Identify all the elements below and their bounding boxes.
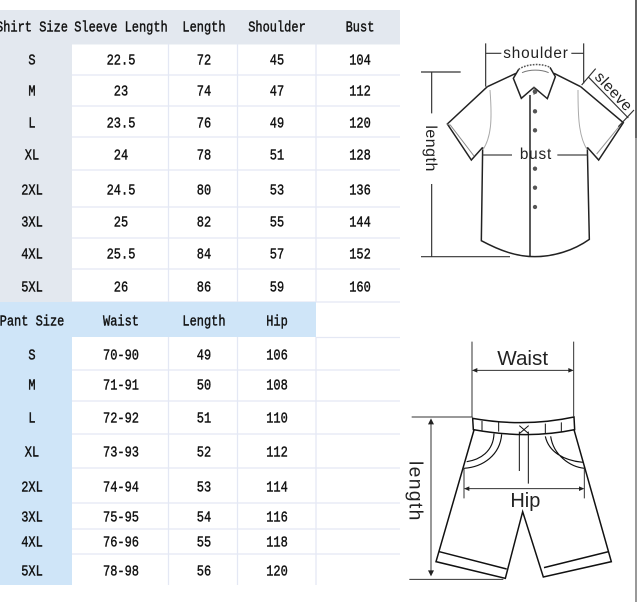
pant row S: S (28, 349, 36, 365)
shirt row XL: XL (25, 149, 39, 165)
shirt row XL: 128 (349, 149, 371, 165)
panel: shirt size table (0, 10, 400, 302)
pant row XL (25, 446, 288, 462)
shirt row 4XL: 57 (270, 248, 284, 264)
shirt row M: 47 (270, 85, 284, 101)
shirt row S: 72 (197, 54, 211, 70)
pant row L: 72-92 (103, 412, 139, 428)
shirt row XL: 24 (114, 149, 128, 165)
shirt row L: 120 (349, 117, 371, 133)
hip measure: Hip (510, 490, 540, 512)
pant row 2XL: 114 (266, 481, 288, 497)
pant row S (28, 349, 288, 365)
pant row 5XL: 5XL (21, 565, 43, 581)
shirt row 3XL (21, 216, 371, 232)
shirt row 2XL: 24.5 (107, 184, 135, 200)
pant row S: 49 (197, 349, 211, 365)
length measure: length (422, 125, 439, 172)
shirt table header: Shoulder (248, 21, 306, 37)
shirt table header (0, 21, 374, 37)
pant row 3XL: 3XL (21, 511, 43, 527)
pant row XL: 112 (266, 446, 288, 462)
pant row S: 106 (266, 349, 288, 365)
pant row 4XL (21, 536, 288, 552)
pant row M: 71-91 (103, 379, 139, 395)
shirt row 4XL: 25.5 (107, 248, 135, 264)
pant row L: 51 (197, 412, 211, 428)
pant row L (28, 412, 288, 428)
shoulder measure (486, 43, 584, 87)
shirt row 3XL: 55 (270, 216, 284, 232)
pant row XL: XL (25, 446, 39, 462)
shirt row S: 22.5 (107, 54, 135, 70)
shirt row 2XL: 2XL (21, 184, 43, 200)
pant row L: L (28, 412, 36, 428)
bust measure: bust (520, 146, 552, 163)
pant row 5XL: 78-98 (103, 565, 139, 581)
pant row 4XL: 55 (197, 536, 211, 552)
shirt buttons (533, 89, 537, 209)
shoulder measure: shoulder (503, 45, 569, 62)
shirt row 3XL: 82 (197, 216, 211, 232)
shirt row 4XL: 4XL (21, 248, 43, 264)
shirt row S: 104 (349, 54, 371, 70)
shirt row L: 23.5 (107, 117, 135, 133)
shirt row 2XL: 53 (270, 184, 284, 200)
shirt row M: 74 (197, 85, 211, 101)
shirt row 5XL: 26 (114, 281, 128, 297)
waist measure: Waist (497, 347, 548, 370)
shirt row 5XL: 59 (270, 281, 284, 297)
pant row 4XL: 118 (266, 536, 288, 552)
pant row 5XL (21, 565, 288, 581)
pant row 2XL: 74-94 (103, 481, 139, 497)
shirt row L (28, 117, 371, 133)
pant row L: 110 (266, 412, 288, 428)
hip measure (464, 468, 584, 512)
shirt row 2XL: 80 (197, 184, 211, 200)
pant row 5XL: 56 (197, 565, 211, 581)
pant row 3XL: 75-95 (103, 511, 139, 527)
pant table header (0, 315, 288, 331)
shirt row S: 45 (270, 54, 284, 70)
shirt row L: 76 (197, 117, 211, 133)
shirt row 3XL: 3XL (21, 216, 43, 232)
panel: pant size table (0, 302, 400, 585)
length measure: length (404, 461, 425, 522)
shirt row L: L (28, 117, 36, 133)
pant row 4XL: 76-96 (103, 536, 139, 552)
pant row 2XL: 2XL (21, 481, 43, 497)
image right edge (635, 0, 637, 602)
sleeve measure (582, 69, 636, 127)
shirt row M (28, 85, 371, 101)
length measure (421, 72, 510, 257)
shirt row 4XL: 152 (349, 248, 371, 264)
waist measure (472, 342, 574, 417)
diagram: shirt measurements (421, 43, 636, 257)
pant row M: 50 (197, 379, 211, 395)
shorts outline (436, 417, 611, 578)
pant row 3XL: 116 (266, 511, 288, 527)
pant table header: Hip (266, 315, 288, 331)
pant row M (28, 379, 288, 395)
shirt row 5XL: 86 (197, 281, 211, 297)
pant row 2XL (21, 481, 288, 497)
shirt table header: Length (182, 21, 226, 37)
shirt row 5XL: 5XL (21, 281, 43, 297)
shirt row XL: 78 (197, 149, 211, 165)
pant row M: M (28, 379, 36, 395)
pant row 5XL: 120 (266, 565, 288, 581)
shirt row XL: 51 (270, 149, 284, 165)
pant row XL: 73-93 (103, 446, 139, 462)
pant row 2XL: 53 (197, 481, 211, 497)
pant row 3XL: 54 (197, 511, 211, 527)
shirt row L: 49 (270, 117, 284, 133)
shirt row 4XL (21, 248, 371, 264)
pant row XL: 52 (197, 446, 211, 462)
pant table header: Length (182, 315, 226, 331)
sleeve measure: sleeve (591, 69, 636, 115)
shirt row M: 23 (114, 85, 128, 101)
bust measure (483, 146, 587, 163)
pant table header: Waist (103, 315, 139, 331)
pant row S: 70-90 (103, 349, 139, 365)
shirt row XL (25, 149, 371, 165)
shirt row S (28, 54, 371, 70)
pant table header: Pant Size (0, 315, 64, 331)
pant row M: 108 (266, 379, 288, 395)
shirt row 3XL: 144 (349, 216, 371, 232)
shirt row 2XL: 136 (349, 184, 371, 200)
diagram: pants measurements (404, 342, 611, 579)
shirt row S: S (28, 54, 36, 70)
shirt row M: 112 (349, 85, 371, 101)
shirt row 3XL: 25 (114, 216, 128, 232)
length measure (404, 417, 503, 579)
shirt table header: Sleeve Length (74, 21, 168, 37)
pant row 4XL: 4XL (21, 536, 43, 552)
shirt row M: M (28, 85, 36, 101)
pant row 3XL (21, 511, 288, 527)
shirt row 2XL (21, 184, 371, 200)
shirt row 5XL: 160 (349, 281, 371, 297)
shirt row 5XL (21, 281, 371, 297)
shirt table header: Bust (346, 21, 374, 37)
shirt row 4XL: 84 (197, 248, 211, 264)
shirt outline (447, 65, 623, 257)
